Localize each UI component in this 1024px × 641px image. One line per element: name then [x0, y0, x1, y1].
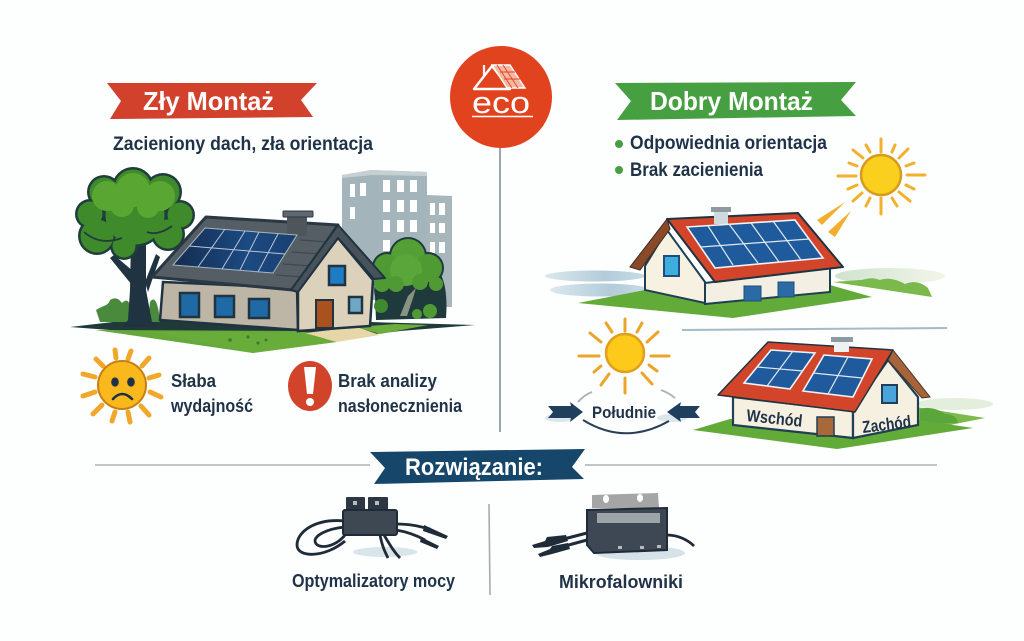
icon: microinverter — [532, 493, 694, 560]
panel: solution — [292, 449, 694, 592]
subtitle: shaded roof: Zacieniony dach, zła orientacja — [113, 134, 373, 155]
illustration: east-west house: Wschód — [746, 406, 803, 431]
bullet list: good conditions — [615, 133, 827, 181]
illustration: house with shaded panels — [152, 211, 385, 331]
illustration: apartment buildings — [342, 170, 452, 307]
illustration: top house with water and hill — [545, 207, 945, 318]
diagram: south orientation arrows: Południe — [592, 404, 656, 422]
navy ribbon heading: Rozwiązanie: Rozwiązanie: — [405, 454, 543, 481]
panel: good installation — [545, 82, 993, 449]
illustration: large tree — [75, 167, 195, 327]
red ribbon heading: Zły Montaż — [107, 83, 317, 119]
green ribbon heading: Dobry Montaż: Dobry Montaż — [650, 86, 813, 116]
illustration: east-west house: Zachód — [861, 412, 912, 437]
solar panels in shade — [173, 228, 297, 273]
text: no sun analysis: nasłonecznienia — [338, 396, 463, 416]
eco logo badge: eco — [472, 85, 530, 120]
green ribbon heading: Dobry Montaż — [615, 82, 856, 120]
navy ribbon heading: Rozwiązanie — [370, 449, 585, 484]
icon: power optimizer — [297, 497, 448, 558]
bullet list: good conditions: Odpowiednia orientacja — [630, 133, 827, 154]
illustration: east-west house — [693, 337, 993, 449]
label: power optimizers: Optymalizatory mocy — [292, 571, 455, 591]
diagram: south orientation arrows — [545, 390, 700, 433]
text: no sun analysis: Brak analizy — [338, 371, 437, 391]
text: no sun analysis — [338, 371, 463, 416]
red ribbon heading: Zły Montaż: Zły Montaż — [143, 86, 274, 116]
bullet list: good conditions: Brak zacienienia — [630, 160, 763, 181]
icon: warning exclamation — [288, 361, 332, 411]
windows and door — [180, 266, 362, 328]
icon: south sun — [579, 319, 669, 393]
text: poor yield: wydajność — [170, 396, 253, 416]
eco logo badge — [450, 46, 552, 148]
text: poor yield — [170, 371, 253, 416]
illustration: small tree — [372, 237, 446, 320]
text: poor yield: Słaba — [171, 371, 217, 391]
label: microinverters: Mikrofalowniki — [559, 572, 683, 592]
illustration: ground — [70, 298, 475, 353]
icon: sun with beams — [817, 139, 925, 237]
icon: sad sun — [83, 350, 161, 422]
panel: bad installation — [70, 83, 475, 422]
